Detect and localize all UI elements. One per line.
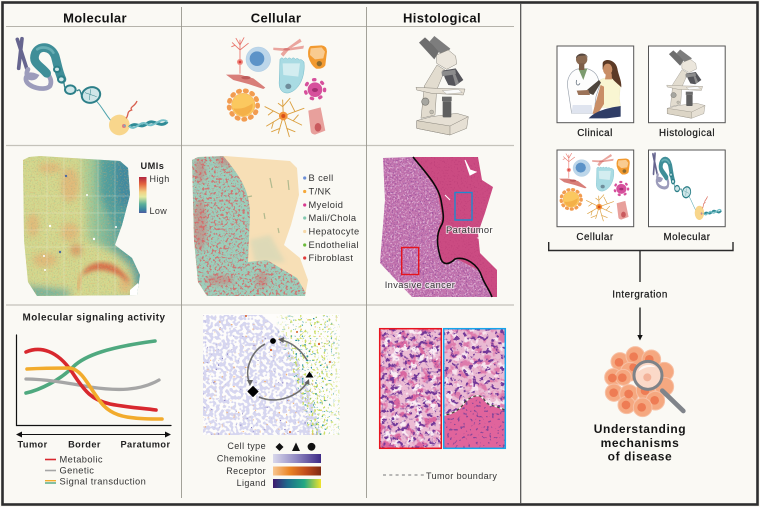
heading: understanding mechanisms of disease: Understanding bbox=[594, 422, 686, 436]
image: paratumor micrograph bbox=[443, 328, 506, 450]
panel divider bbox=[520, 3, 522, 504]
legend: tumor boundary bbox=[383, 471, 497, 481]
icon: cell cluster with magnifier bbox=[605, 347, 683, 417]
icon: histology microscope bbox=[416, 36, 468, 135]
label: histological: Histological bbox=[659, 128, 715, 139]
legend: cell types: Mali/Chola bbox=[308, 213, 357, 223]
chart: signaling curves bbox=[16, 335, 171, 426]
label: paratumor: Paratumor bbox=[446, 225, 493, 235]
legend: scatter scales bbox=[217, 441, 321, 488]
heading: understanding mechanisms of disease: mechanisms bbox=[601, 436, 679, 450]
box: invasive ROI bbox=[402, 248, 419, 274]
chart: ligand–receptor scatter bbox=[203, 314, 342, 436]
legend: pathways: Metabolic bbox=[60, 454, 103, 464]
box: paratumor ROI bbox=[455, 192, 472, 220]
legend: UMI colour bar: High bbox=[150, 174, 170, 184]
chart: UMI spatial map bbox=[23, 156, 140, 296]
title: molecular signaling activity: Molecular signaling activity bbox=[23, 312, 165, 324]
heading: molecular: Molecular bbox=[63, 10, 127, 26]
legend: cell types: Fibroblast bbox=[308, 253, 353, 263]
label: integration: Intergration bbox=[612, 290, 668, 300]
legend: scatter scales: Cell type bbox=[227, 441, 266, 451]
magnifier handle bbox=[662, 391, 683, 411]
arrow: integration to understanding bbox=[637, 308, 643, 340]
legend: scatter scales: Receptor bbox=[226, 466, 266, 476]
heading: cellular: Cellular bbox=[251, 10, 301, 26]
heading: understanding mechanisms of disease: of disease bbox=[608, 450, 672, 464]
axis: tumor to paratumor arrow bbox=[16, 432, 171, 450]
bracket bbox=[549, 242, 733, 282]
axis: tumor to paratumor arrow: Tumor bbox=[18, 440, 48, 450]
arrows: signaling loop bbox=[248, 340, 308, 400]
heading: histological: Histological bbox=[403, 10, 481, 26]
chart: cell-type spatial map bbox=[192, 156, 308, 296]
heading: understanding mechanisms of disease bbox=[594, 422, 686, 464]
legend: cell types: Myeloid bbox=[308, 200, 343, 210]
label: cellular: Cellular bbox=[576, 232, 614, 243]
legend: cell types bbox=[303, 173, 360, 263]
legend: tumor boundary: Tumor boundary bbox=[426, 471, 497, 481]
legend: cell types: B cell bbox=[308, 173, 334, 183]
legend: pathways: Signal transduction bbox=[60, 477, 146, 487]
marker: diamond bbox=[248, 386, 258, 396]
image: H&E histology section bbox=[380, 156, 497, 298]
axis: tumor to paratumor arrow: Paratumor bbox=[120, 440, 170, 450]
magnifier lens bbox=[634, 361, 662, 389]
card: clinical bbox=[557, 46, 634, 123]
label: molecular: Molecular bbox=[664, 232, 711, 243]
legend: UMI colour bar bbox=[139, 161, 170, 216]
label: clinical: Clinical bbox=[577, 128, 613, 139]
legend: scatter scales: Ligand bbox=[237, 478, 266, 488]
icon: DNA to chromatin bbox=[17, 39, 167, 135]
legend: pathways bbox=[45, 454, 146, 487]
legend: cell types: Endothelial bbox=[308, 240, 359, 250]
marker: triangle bbox=[306, 372, 314, 378]
legend: cell types: T/NK bbox=[308, 187, 332, 197]
marker: circle bbox=[270, 338, 276, 344]
image: invasive micrograph bbox=[379, 328, 442, 449]
legend: cell types: Hepatocyte bbox=[308, 227, 360, 237]
panel: integration bbox=[549, 46, 733, 464]
boundary line bbox=[413, 157, 492, 297]
legend: pathways: Genetic bbox=[60, 466, 94, 476]
icon: cell types bbox=[226, 38, 327, 137]
card: molecular bbox=[648, 150, 725, 227]
card: histological bbox=[648, 46, 725, 123]
axis: tumor to paratumor arrow: Border bbox=[68, 440, 101, 450]
legend: UMI colour bar: Low bbox=[150, 206, 167, 216]
label: invasive cancer: Invasive cancer bbox=[385, 280, 455, 290]
legend: scatter scales: Chemokine bbox=[217, 454, 266, 464]
legend: UMI colour bar: UMIs bbox=[140, 161, 164, 171]
card: cellular bbox=[557, 150, 634, 227]
panel: left grid bbox=[6, 7, 514, 498]
